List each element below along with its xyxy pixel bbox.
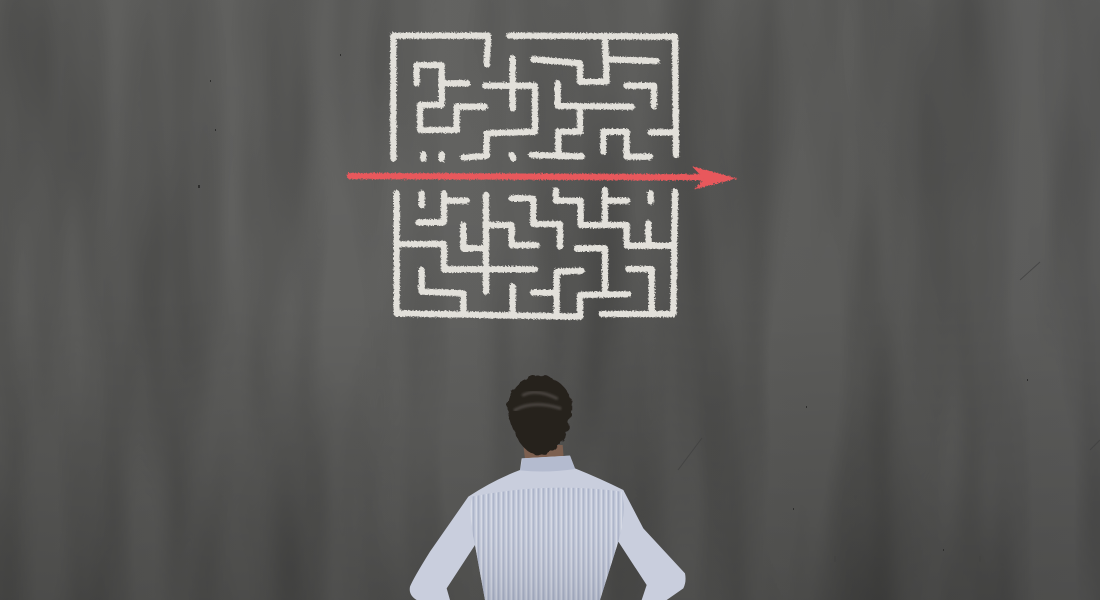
pinstriped shirt back [471,488,624,600]
chalk maze: lower half [397,190,675,317]
shirt collar [520,456,575,472]
neck [523,445,564,462]
red chalk arrow cutting through the maze [350,166,737,189]
man seen from behind [410,375,686,600]
chalk maze: upper half [393,36,676,159]
shirt silhouette with sleeves [410,456,686,600]
dark curly hair [507,375,572,455]
